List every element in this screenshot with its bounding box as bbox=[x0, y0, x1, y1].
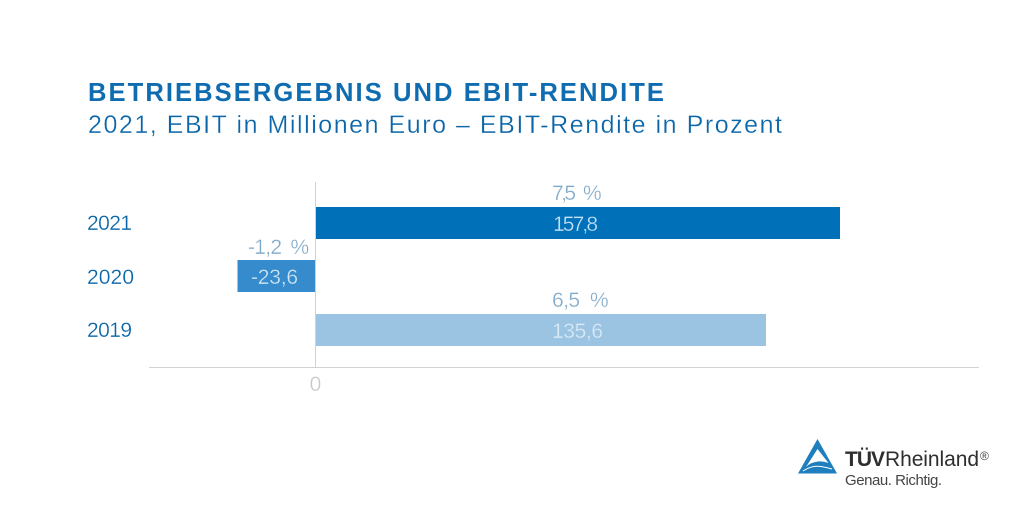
vertical zero axis bbox=[315, 182, 316, 368]
margin label 2020: -1,2 bbox=[248, 236, 282, 259]
logo wordmark: Rheinland bbox=[885, 448, 979, 471]
bar 2021 bbox=[316, 207, 840, 239]
title: BETRIEBSERGEBNIS UND EBIT-RENDITE bbox=[88, 79, 664, 107]
row: 2019 bbox=[87, 289, 766, 346]
bar 2020 bbox=[238, 260, 315, 292]
row: 2020 bbox=[87, 236, 315, 292]
row: 2021 bbox=[87, 182, 840, 239]
margin label 2021: 7,5 bbox=[552, 182, 576, 205]
bar 2019 bbox=[316, 314, 766, 346]
chart: EBIT by year bbox=[87, 182, 979, 396]
logo wordmark: TÜV bbox=[845, 448, 885, 471]
registered mark: ® bbox=[980, 449, 989, 463]
bar value 2021: 157,8 bbox=[553, 213, 598, 236]
icon: triangle bbox=[798, 439, 837, 474]
margin label 2021: % bbox=[583, 182, 602, 205]
margin label 2020: % bbox=[290, 236, 309, 259]
bar value 2020: -23,6 bbox=[251, 266, 298, 289]
logo tagline: Genau. Richtig. bbox=[845, 472, 942, 489]
horizontal axis bbox=[149, 367, 979, 368]
subtitle: 2021, EBIT in Millionen Euro – EBIT-Rendite in Prozent bbox=[88, 111, 782, 139]
axis label: zero: 0 bbox=[310, 373, 321, 396]
logo: TÜV Rheinland bbox=[798, 439, 989, 489]
margin label 2019: 6,5 bbox=[552, 289, 580, 312]
year label 2021: 2021 bbox=[87, 212, 132, 235]
year label 2020: 2020 bbox=[87, 266, 134, 289]
margin label 2019: % bbox=[590, 289, 609, 312]
year label 2019: 2019 bbox=[87, 319, 132, 342]
bar value 2019: 135,6 bbox=[552, 320, 603, 343]
